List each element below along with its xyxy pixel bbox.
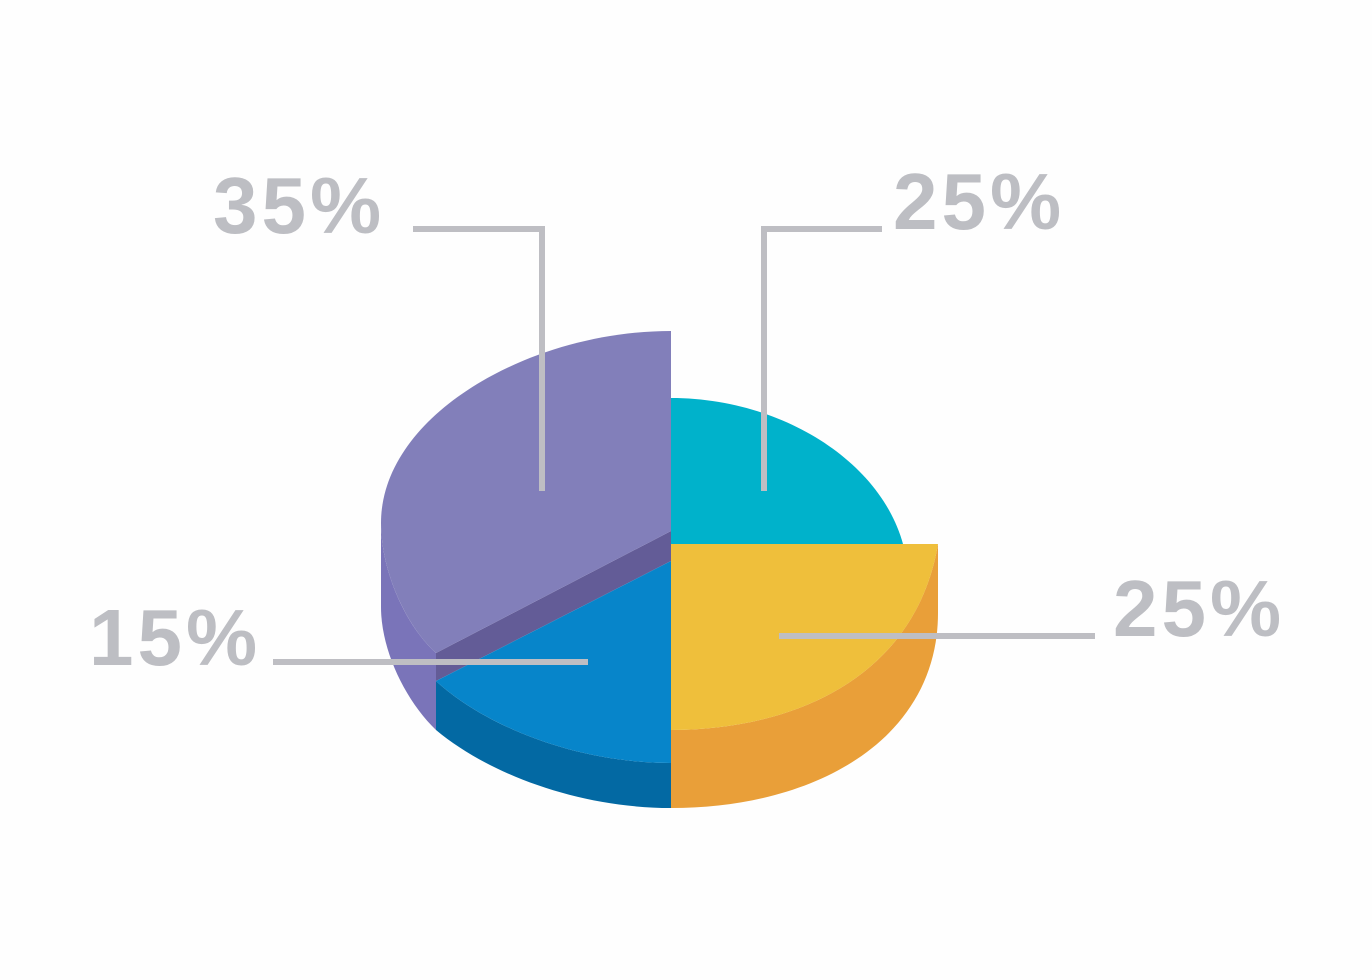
label: 35%: 35%: [213, 161, 385, 250]
leader line: yellow 25%: [779, 633, 1095, 639]
pie chart: [381, 331, 938, 808]
slice: teal 25%: [671, 398, 903, 544]
leader line: 35%: [413, 229, 542, 491]
leader line: 15%: [273, 659, 588, 665]
label: yellow 25%: 25%: [1113, 564, 1285, 653]
slice: blue 15%: [436, 561, 671, 763]
slice: purple inner wall: [436, 531, 671, 681]
slice: purple side wall: [381, 523, 436, 730]
label: 15%: 15%: [89, 593, 261, 682]
slice: orange side wall: [671, 544, 938, 808]
label: teal 25%: 25%: [893, 157, 1065, 246]
slice: yellow 25%: [671, 544, 938, 730]
slice: blue side wall: [436, 681, 671, 808]
leader line: teal 25%: [764, 229, 882, 491]
slice: purple 35%: [381, 331, 671, 653]
